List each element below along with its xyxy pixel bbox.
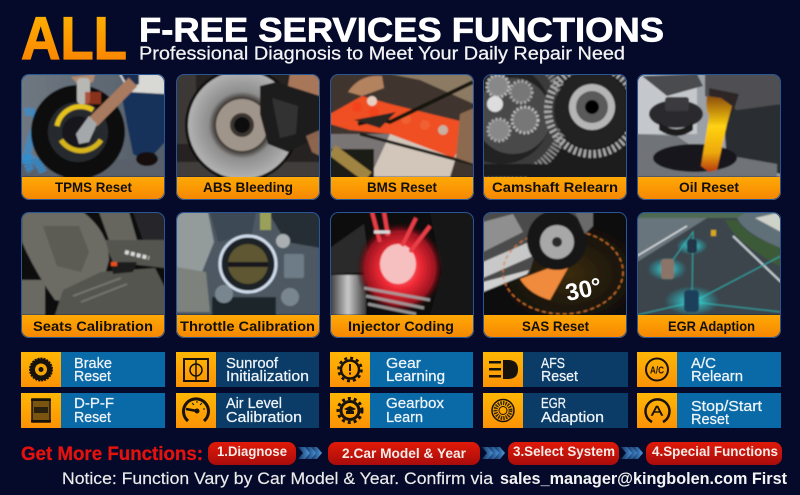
icon: A/C [646,358,668,380]
label [330,177,474,200]
panel: Injector Coding [330,212,474,338]
feature: Sunroof Initialization: Sunroof [226,356,279,372]
arrow 2 [482,447,505,459]
label [176,177,320,200]
panel: Oil Reset: Oil Reset [679,179,739,195]
panel: Camshaft Relearn: Camshaft Relearn [492,179,618,195]
feature: EGR Adaption [483,393,628,428]
icon: brake disc [30,358,52,380]
feature: D-P-F Reset [21,393,165,428]
panel: SAS Reset [483,210,627,338]
subtitle: Professional Diagnosis to Meet Your Daily Repair Need [139,44,625,64]
feature: Air Level Calibration: Calibration [226,410,302,426]
panel: Oil Reset [637,74,781,200]
feature: AFS Reset: AFS [541,356,565,372]
feature: D-P-F Reset: Reset [74,410,111,426]
feature: Gear Learning: Learning [386,369,445,385]
feature: A/C Relearn: Relearn [691,369,743,385]
panel: Injector Coding: Injector Coding [348,318,454,334]
feature: Gear Learning [330,352,473,387]
panel: SAS Reset: SAS Reset [522,318,589,334]
icon: EGR ring [492,400,514,422]
label [483,315,627,338]
heading: Get More Functions: Get More Functions: [21,444,203,465]
notice text: Notice: Function Vary by Car Model & Year. Confirm via [62,469,494,488]
panel: Seats Calibration [21,212,165,338]
label [21,315,165,338]
photo: throttle body [176,212,320,315]
title: ALL: ALL [21,5,127,72]
photo: gears [483,74,627,177]
panel: EGR Adaption: EGR Adaption [668,318,755,334]
label [330,315,474,338]
arrow 1 [298,447,322,459]
feature: Gearbox Learn: Gearbox [386,396,445,412]
feature: AFS Reset: Reset [541,369,578,385]
step 4: 4.Special Functions [652,444,778,459]
icon: gauge [184,399,208,421]
panel: ABS Bleeding [176,68,320,200]
feature: Sunroof Initialization: Initialization [226,369,309,385]
feature: Brake Reset [21,352,165,387]
photo: brake disc [176,68,320,182]
panel: TPMS Reset [21,74,165,200]
photo: car battery [330,74,474,177]
feature: Gear Learning: Gear [386,356,421,372]
title: F-REE SERVICES FUNCTIONS: F-REE SERVICES FUNCTIONS [139,12,664,50]
panel: ABS Bleeding: ABS Bleeding [203,179,293,195]
panel: Seats Calibration: Seats Calibration [33,318,153,334]
icon: gear with cap [338,398,362,422]
photo: smart road [637,212,781,316]
panel: Throttle Calibration [176,212,320,338]
photo: oil pouring [637,74,781,177]
panel: BMS Reset: BMS Reset [367,179,437,195]
step 1: 1.Diagnose [217,444,287,459]
feature: A/C Relearn: A/C [691,356,716,372]
icon: headlight [489,360,518,379]
panel: EGR Adaption [637,212,781,338]
panel: Camshaft Relearn [483,74,627,200]
photo: car seat [21,212,165,315]
feature: D-P-F Reset: D-P-F [74,396,114,412]
feature: EGR Adaption: EGR [541,396,566,412]
feature: Stop/Start Reset: Stop/Start [691,399,762,415]
photo: glowing injector [330,212,474,315]
label [637,177,781,200]
panel: Throttle Calibration: Throttle Calibration [180,318,315,334]
photo: steering angle [483,210,627,315]
step 3 [508,442,619,465]
step 3: 3.Select System [513,444,615,459]
feature: Gearbox Learn [330,393,473,428]
label [21,177,165,200]
feature: Sunroof Initialization [176,352,319,387]
feature: A/C Relearn [637,352,781,387]
step 4 [646,442,782,465]
step 2 [328,442,480,465]
text: 30 degrees: 30° [563,273,604,307]
icon: gear warning [338,358,362,381]
icon: A/C: A/C [650,366,664,376]
icon: auto stop: A [651,402,664,418]
step 2: 2.Car Model & Year [342,446,467,461]
step 1 [208,442,296,465]
feature: AFS Reset [483,352,628,387]
panel: TPMS Reset: TPMS Reset [55,179,132,195]
panel: BMS Reset [330,74,474,200]
feature: Air Level Calibration: Air Level [226,396,282,412]
feature: Brake Reset: Brake [74,356,112,372]
photo: tyre and mechanic [21,74,165,179]
icon: sunroof [184,359,208,381]
arrow 3 [621,447,643,459]
label [176,315,320,338]
label [637,315,781,338]
feature: Stop/Start Reset: Reset [691,412,729,428]
feature: Air Level Calibration [176,393,319,428]
feature: Gearbox Learn: Learn [386,410,423,426]
feature: Brake Reset: Reset [74,369,111,385]
contact email: sales_manager@kingbolen.com First [500,469,787,488]
feature: Stop/Start Reset [637,393,781,428]
icon: DPF filter [31,399,51,422]
feature: EGR Adaption: Adaption [541,410,604,426]
label [483,177,627,200]
icon: auto stop [646,399,670,422]
